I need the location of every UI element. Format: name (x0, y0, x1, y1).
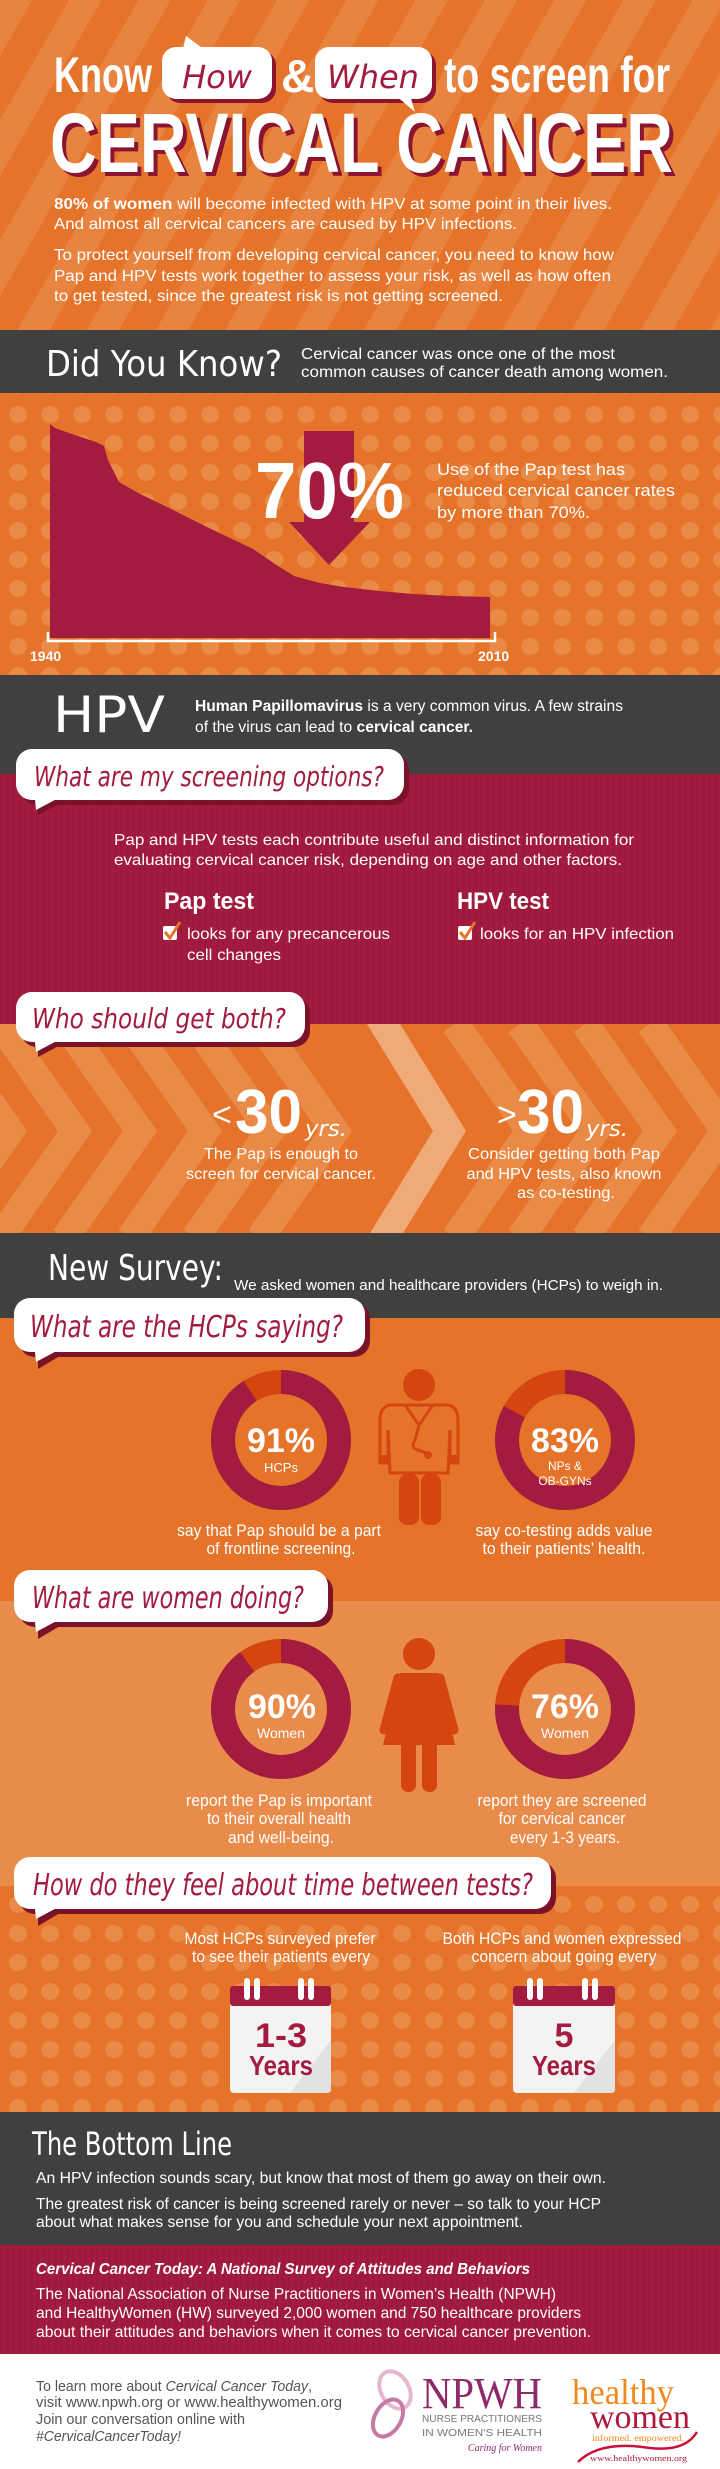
background: women section (0, 1601, 720, 1886)
bubble: What are my screening options (16, 749, 409, 815)
intro text: 80% of women will become infected with HPV at some point in their lives. (54, 196, 612, 213)
donut: 90% women: Women (257, 1725, 305, 1741)
donut: 76% women: Women (541, 1725, 589, 1741)
background: HCP section (0, 1318, 720, 1601)
logo: NPWH (367, 2366, 542, 2454)
donut: 90% women (223, 1651, 339, 1767)
option: HPV test (457, 888, 674, 943)
donut: 83% NPs & OB-GYNs: OB-GYNs (538, 1474, 592, 1488)
title (50, 36, 677, 194)
donut: 83% NPs & OB-GYNs (507, 1382, 623, 1498)
bubble: What are my screening options: What are my screening options? (34, 760, 384, 793)
age: under 30 (186, 1078, 376, 1183)
background: dotted chart section (0, 393, 720, 675)
stat text: reduced cervical cancer rates (437, 481, 675, 500)
caption: women Pap: to their overall health (207, 1810, 351, 1828)
option: HPV test: looks for an HPV infection (480, 926, 674, 943)
did you know text: Cervical cancer was once one of the most (301, 346, 616, 363)
caption: HCPs co-testing: say co-testing adds value (476, 1522, 652, 1540)
option: Pap test (163, 888, 390, 964)
bottom line text: An HPV infection sounds scary, but know that most of them go away on their own. (36, 2170, 606, 2187)
intro text: Pap and HPV tests work together to assess your risk, as well as how often (54, 268, 611, 285)
age: under 30: 30 (235, 1078, 302, 1147)
age: under 30: yrs. (304, 1117, 347, 1142)
heading: The Bottom Line: The Bottom Line (31, 2125, 232, 2163)
logo: NPWH: NURSE PRACTITIONERS (422, 2414, 542, 2425)
background: new survey band (0, 1233, 720, 1318)
icon: calendar 1-3 years (230, 1978, 331, 2093)
donut: 83% NPs & OB-GYNs: NPs & (548, 1459, 582, 1473)
caption: concern every 5: concern about going every (472, 1948, 657, 1966)
caption: women Pap: report the Pap is important (186, 1792, 372, 1810)
bubble: What are women doing: What are women doing? (32, 1581, 304, 1616)
background: header stripes (0, 0, 720, 330)
age: under 30: The Pap is enough to (204, 1146, 358, 1163)
age: over 30: and HPV tests, also known (466, 1166, 662, 1183)
age: under 30: < (212, 1096, 232, 1134)
survey info: about their attitudes and behaviors when it comes to cervical cancer prevention. (36, 2324, 591, 2341)
caption: women screened (478, 1792, 646, 1847)
donut: 90% women: 90% (248, 1688, 316, 1726)
icon: doctor (380, 1369, 458, 1525)
did you know text: common causes of cancer death among women. (301, 364, 668, 381)
chart: cervical cancer rates 1940-2010 (30, 424, 509, 664)
intro text: And almost all cervical cancers are caused by HPV infections. (54, 216, 517, 233)
caption: HCPs Pap (177, 1522, 381, 1558)
age: over 30 (466, 1078, 662, 1202)
logo: healthy women (572, 2372, 697, 2463)
intro text (54, 196, 614, 305)
icon: calendar 1-3 years: 1-3 (255, 2017, 307, 2055)
bubble: What are women doing (14, 1570, 333, 1639)
stat text: by more than 70%. (437, 503, 590, 522)
background: survey info band (0, 2245, 720, 2354)
donut: 76% women (507, 1651, 623, 1767)
bubble: Who should get both (16, 992, 310, 1057)
age: over 30: Consider getting both Pap (468, 1146, 660, 1163)
HPV text: of the virus can lead to cervical cancer. (195, 719, 473, 736)
icon: calendar 1-3 years: Years (249, 2050, 313, 2081)
screening options text: Pap and HPV tests each contribute useful and distinct information for (114, 832, 635, 849)
bubble: What are the HCPs saying (14, 1298, 370, 1369)
bubble: What are the HCPs saying: What are the HCPs saying? (30, 1310, 343, 1345)
caption: women Pap: and well-being. (228, 1829, 334, 1847)
icon: calendar 5 years (513, 1978, 615, 2093)
logo: healthy women: informed. empowered. (592, 2433, 684, 2444)
footer text: To learn more about Cervical Cancer Today, (36, 2378, 312, 2395)
logo: NPWH: Caring for Women (468, 2443, 542, 2454)
caption: women screened: for cervical cancer (498, 1810, 626, 1828)
stat text: Use of the Pap test has (437, 460, 625, 479)
background: did you know band (0, 330, 720, 393)
chart: cervical cancer rates 1940-2010: 2010 (478, 648, 509, 664)
logo: healthy women: women (590, 2399, 690, 2436)
survey info: Cervical Cancer Today: A National Survey of Attitudes and Behaviors (36, 2261, 530, 2278)
donut: 91% HCPs: 91% (247, 1422, 315, 1460)
icon: calendar 5 years: 5 (555, 2017, 573, 2055)
age: over 30: 30 (517, 1078, 584, 1147)
age: under 30: screen for cervical cancer. (186, 1166, 376, 1183)
caption: HCPs Pap: of frontline screening. (206, 1540, 356, 1558)
footer text: #CervicalCancerToday! (36, 2428, 182, 2445)
bubble: When (315, 47, 436, 112)
caption: HCPs prefer: Most HCPs surveyed prefer (184, 1930, 376, 1948)
HPV text (195, 698, 623, 736)
icon: woman (383, 1638, 455, 1792)
bubble: How: How (182, 58, 253, 96)
caption: women screened: report they are screened (478, 1792, 646, 1810)
background: chevron section (0, 1024, 720, 1238)
title: & (281, 50, 314, 102)
caption: concern every 5 (442, 1930, 682, 1966)
donut: 91% HCPs (223, 1382, 339, 1498)
caption: women Pap (186, 1792, 372, 1847)
caption: HCPs prefer (184, 1930, 376, 1966)
option: Pap test: cell changes (187, 947, 281, 964)
option: Pap test: Pap test (164, 888, 254, 915)
survey text: We asked women and healthcare providers (HCPs) to weigh in. (234, 1277, 663, 1294)
heading: New Survey: New Survey: (48, 1248, 223, 1289)
bubble: When: When (327, 58, 419, 96)
intro text: to get tested, since the greatest risk is not getting screened. (54, 288, 503, 305)
background: screening options section (0, 774, 720, 1024)
bubble: How do they feel about time between tests (14, 1857, 556, 1926)
bottom line text (36, 2170, 606, 2231)
donut: 83% NPs & OB-GYNs: 83% (531, 1422, 599, 1460)
age: over 30: as co-testing. (517, 1185, 615, 1202)
caption: HCPs Pap: say that Pap should be a part (177, 1522, 381, 1540)
bubble: How (162, 36, 276, 103)
caption: HCPs prefer: to see their patients every (192, 1948, 371, 1966)
title: Know (54, 47, 152, 103)
age: over 30: yrs. (585, 1117, 628, 1142)
age: over 30: > (497, 1096, 517, 1134)
survey info: The National Association of Nurse Practitioners in Women’s Health (NPWH) (36, 2286, 556, 2303)
screening options text (114, 832, 635, 869)
bubble: How do they feel about time between tests: How do they feel about time between tests? (33, 1868, 533, 1903)
donut: 76% women: 76% (531, 1688, 599, 1726)
survey info (36, 2261, 591, 2341)
logo: NPWH: IN WOMEN'S HEALTH (422, 2428, 542, 2439)
footer text (36, 2378, 342, 2445)
caption: HCPs co-testing (476, 1522, 652, 1558)
intro text: To protect yourself from developing cervical cancer, you need to know how (54, 247, 614, 264)
heading: Did You Know: Did You Know? (46, 344, 282, 385)
background: HPV band (0, 675, 720, 774)
logo: healthy women: healthy (572, 2372, 674, 2412)
option: HPV test: HPV test (457, 888, 549, 915)
icon: calendar 5 years: Years (532, 2050, 596, 2081)
stat: 70%: 70% (255, 446, 404, 535)
logo: NPWH: NPWH (422, 2369, 542, 2418)
background: time section (0, 1886, 720, 2112)
footer text: visit www.npwh.org or www.healthywomen.org (36, 2394, 342, 2411)
did you know text (301, 346, 668, 381)
arrow: down (289, 431, 370, 565)
chart: cervical cancer rates 1940-2010: 1940 (30, 648, 61, 664)
caption: concern every 5: Both HCPs and women expressed (442, 1930, 682, 1948)
heading: HPV: HPV (53, 686, 165, 744)
footer text: Join our conversation online with (36, 2411, 245, 2428)
stat text (437, 460, 675, 522)
survey info: and HealthyWomen (HW) surveyed 2,000 women and 750 healthcare providers (36, 2305, 581, 2322)
background: bottom line band (0, 2112, 720, 2245)
logo: healthy women: www.healthywomen.org (590, 2454, 687, 2463)
big chevron (367, 1024, 466, 1238)
bottom line text: about what makes sense for you and schedule your next appointment. (36, 2214, 523, 2231)
bubble: Who should get both: Who should get both? (32, 1002, 286, 1035)
caption: HCPs co-testing: to their patients’ health. (482, 1540, 646, 1558)
bottom line text: The greatest risk of cancer is being screened rarely or never – so talk to your HCP (36, 2196, 601, 2213)
donut: 91% HCPs: HCPs (264, 1460, 298, 1475)
screening options text: evaluating cervical cancer risk, depending on age and other factors. (114, 852, 622, 869)
HPV text: Human Papillomavirus is a very common virus. A few strains (195, 698, 623, 715)
caption: women screened: every 1-3 years. (510, 1829, 620, 1847)
option: Pap test: looks for any precancerous (187, 926, 390, 943)
